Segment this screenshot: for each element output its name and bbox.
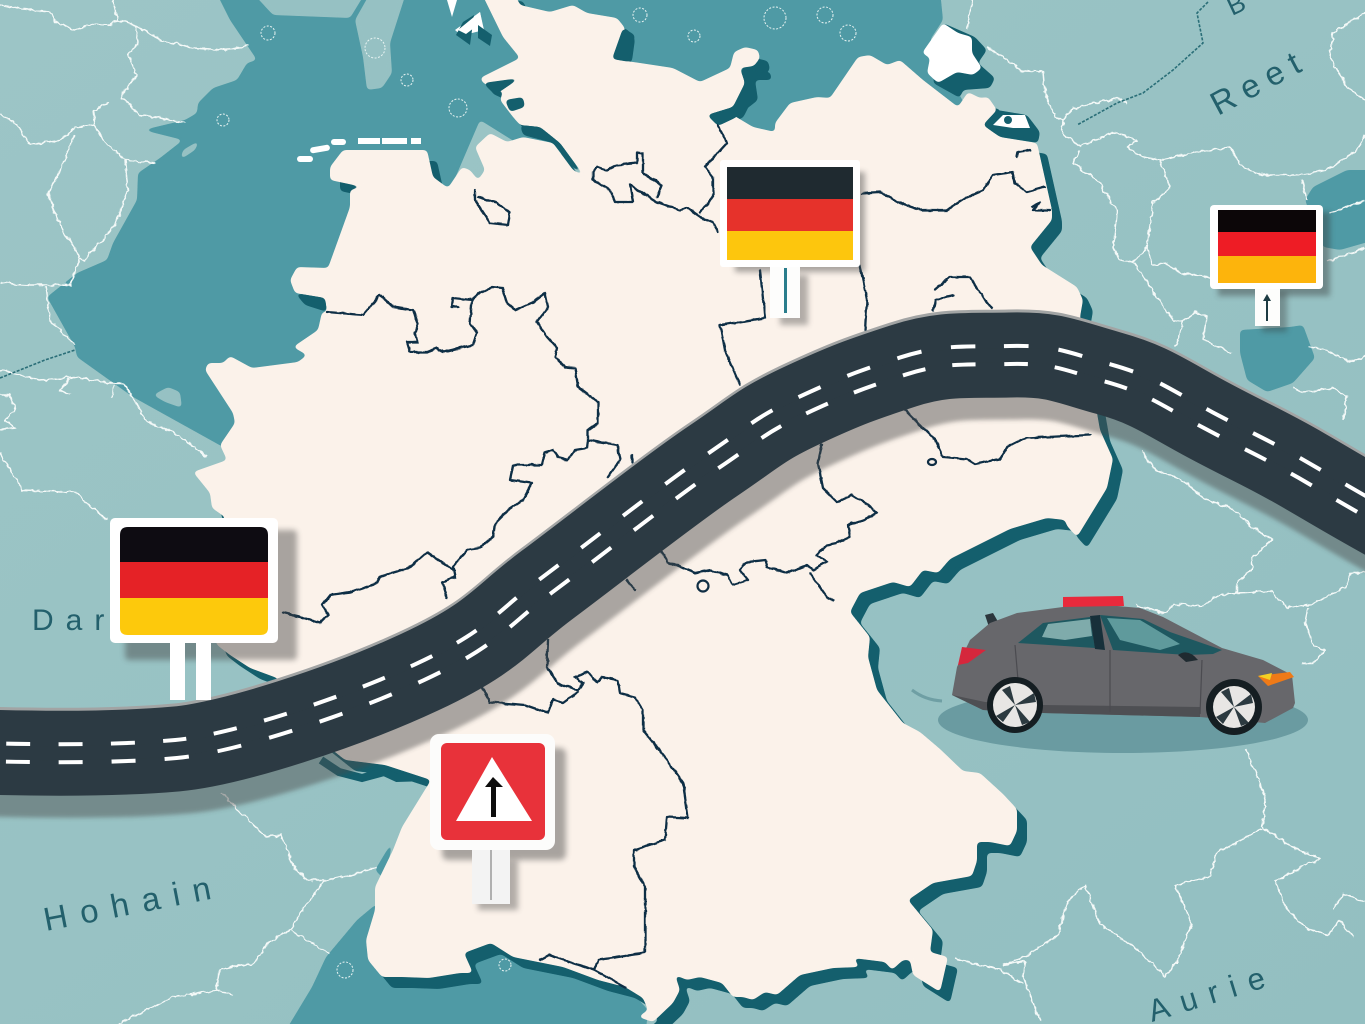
lake rings [698,459,936,592]
rear wheel [987,677,1043,733]
small scribbled islets in the sea [217,7,856,978]
car windows [1018,617,1095,648]
skid mark [912,690,942,701]
warning triangle with arrow [456,757,532,821]
north-east island [922,23,995,98]
label: Dar: Dar [32,604,116,637]
car [912,596,1308,753]
car shadow [938,687,1308,753]
state borders [283,125,1090,987]
tail light [958,647,986,665]
flag sign right [1210,205,1330,332]
dark dotted route lines [0,2,1208,378]
sea inlets: light land shapes [153,0,407,408]
top-left islets [447,0,492,46]
roof light [1063,596,1124,608]
Frisian island dashes [297,138,421,162]
rear spoiler [985,613,1004,640]
Germany land [193,0,1113,1022]
head light [1258,672,1294,686]
west and south coast dark ribbon [321,760,428,778]
car body [952,606,1295,723]
flag sign left [110,518,297,700]
road shadow [0,377,1365,775]
Germany land shadow [203,1,1123,1024]
flag sign centre [720,160,865,325]
highway road [0,352,1365,753]
warning sign [430,734,566,910]
Ruegen island [983,110,1040,143]
coast shadow patches [295,28,772,312]
label: Hohain: Hohain [40,867,227,938]
front wheel [1206,679,1262,735]
label: Reet: Reet [1204,40,1315,122]
